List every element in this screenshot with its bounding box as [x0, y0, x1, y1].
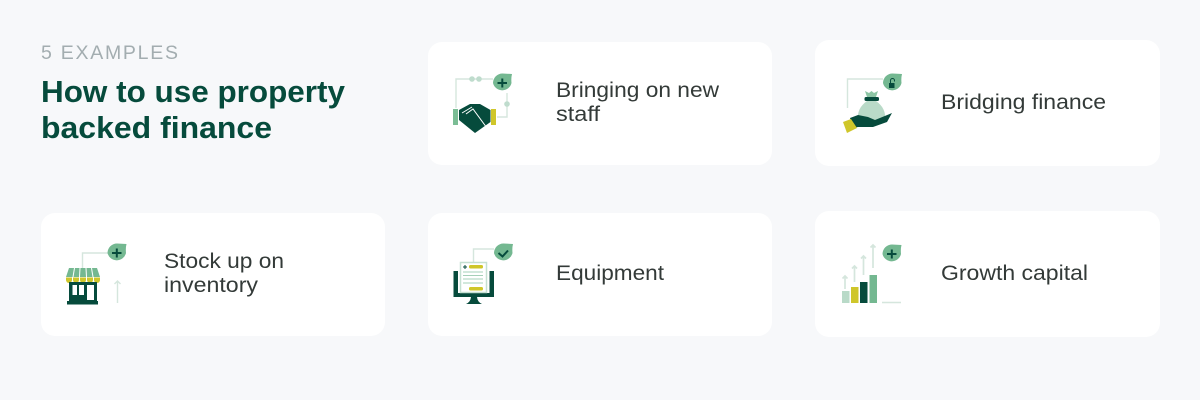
title [41, 74, 346, 145]
heading block [41, 42, 346, 145]
panel: bringing on new staff [428, 42, 772, 165]
title: How to use property [41, 74, 346, 109]
panel: stock up on inventory [41, 213, 385, 336]
icon: hand holding money bag [843, 74, 902, 133]
label: Growth capital [941, 261, 1088, 285]
eyebrow: 5 examples: 5 EXAMPLES [41, 42, 178, 64]
label: Bringing on new [556, 78, 719, 102]
label: Bridging finance [941, 90, 1106, 114]
icon: handshake [453, 74, 512, 133]
label [556, 78, 719, 126]
label: inventory [164, 273, 258, 297]
panel: growth capital [815, 211, 1160, 337]
label [164, 249, 284, 297]
icon: shop [66, 244, 126, 304]
label: staff [556, 102, 600, 126]
panel: equipment [428, 213, 772, 336]
icon: bar chart with arrows [842, 244, 902, 303]
panel: bridging finance [815, 40, 1160, 166]
label: Equipment [556, 261, 664, 285]
title: backed finance [41, 110, 272, 145]
label: Stock up on [164, 249, 284, 273]
icon: monitor with document [454, 244, 513, 304]
